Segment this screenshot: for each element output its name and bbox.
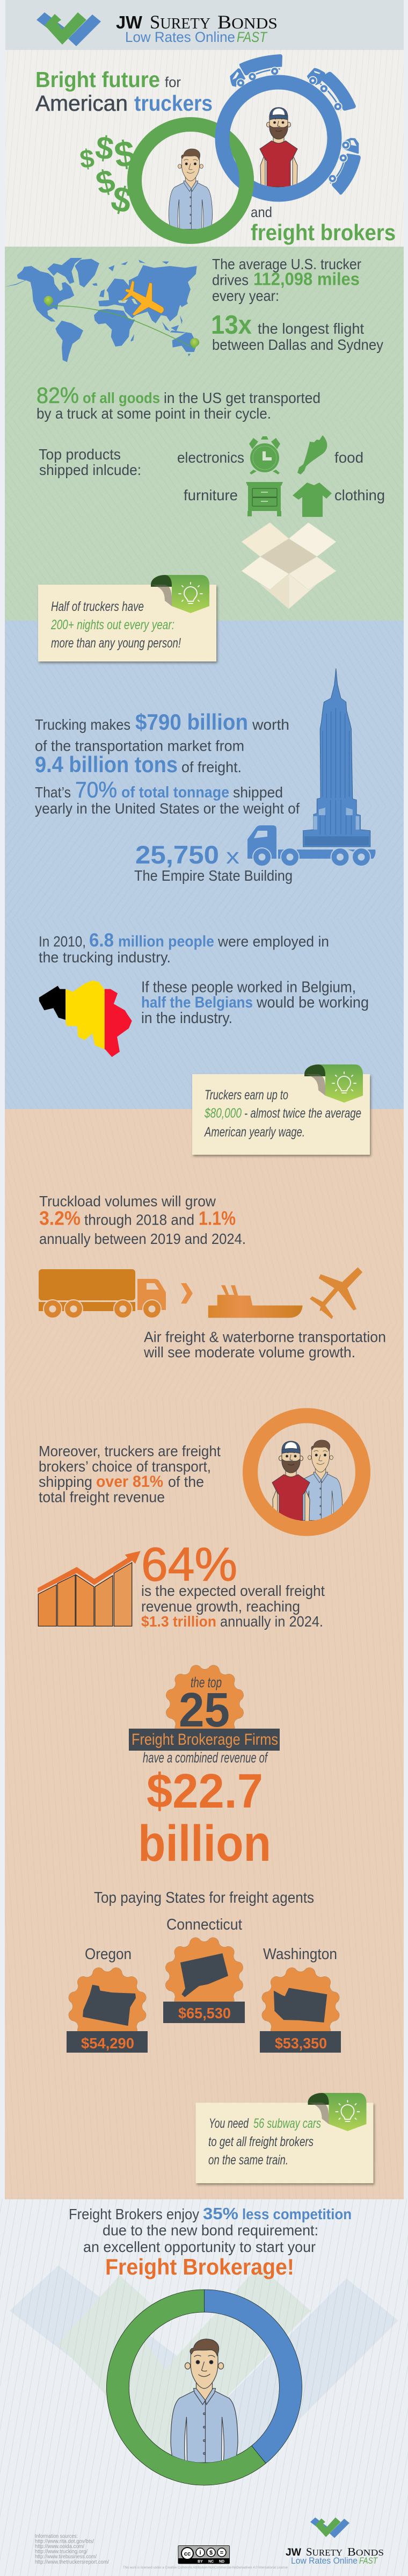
icon: dollar signs: $ xyxy=(78,145,96,174)
text: over 81 percent xyxy=(39,1443,221,1506)
icon: dollar signs: $ xyxy=(107,178,136,221)
text: 82 percent of goods xyxy=(37,383,320,422)
interlocked rings with broker and trucker xyxy=(134,82,334,236)
broker figure xyxy=(171,2339,238,2463)
text: trucking market value xyxy=(35,709,300,817)
callout text: Truckers earn up to xyxy=(205,1088,288,1103)
callout text: 200+ nights out every year: xyxy=(50,617,174,632)
flight route xyxy=(49,306,194,348)
text: trucking market value: shipped xyxy=(233,784,283,801)
state badge: Washington: Washington xyxy=(263,1946,337,1963)
icon: alarm clock xyxy=(249,436,280,474)
icon: flatbed truck xyxy=(247,825,376,866)
text: 6.8 million people: million people xyxy=(118,933,214,950)
text: 25,750 times: x xyxy=(226,845,239,868)
icon: open cardboard box xyxy=(242,522,336,609)
subtitle: and xyxy=(251,204,272,220)
text: 64 percent growth: revenue growth, reaching xyxy=(141,1598,300,1615)
footer brand logo: Low Rates Online xyxy=(291,2556,358,2566)
text: trucker miles: every year: xyxy=(212,287,279,304)
text: information sources xyxy=(35,2534,109,2565)
text: 64 percent growth: is the expected overall freight xyxy=(141,1582,325,1599)
icon: Creative Commons licence badge: NC xyxy=(208,2560,214,2564)
chart: rising bars with arrow xyxy=(38,1551,141,1626)
text: top products: shipped inlcude: xyxy=(39,462,141,478)
tagline: FAST xyxy=(237,29,268,45)
callout text: $80,000 xyxy=(204,1106,242,1121)
text: 6.8 million people: the trucking industry. xyxy=(39,949,171,966)
truck one xyxy=(230,54,282,88)
text: trucker miles: drives xyxy=(212,272,249,288)
text: trucker miles: The average U.S. trucker xyxy=(212,256,361,272)
trucker figure xyxy=(260,107,297,188)
tagline: Low Rates Online xyxy=(125,29,235,45)
text: combined revenue: $22.7 xyxy=(147,1765,263,1818)
text: trucking market value: worth xyxy=(252,716,289,733)
icon: Creative Commons licence badge: $ xyxy=(209,2550,213,2556)
icon: ribbon with light bulb xyxy=(304,1064,363,1103)
state badge: Oregon xyxy=(63,1946,152,2053)
text: 25,750 times xyxy=(134,840,293,884)
text: less competition: Freight Brokerage! xyxy=(105,2254,294,2279)
icon: dollar signs: $ xyxy=(92,162,119,202)
icon: ribbon with light bulb xyxy=(308,2093,366,2131)
text: 64 percent growth xyxy=(141,1538,325,1630)
brand name: BONDS xyxy=(217,11,278,33)
donut chart: 35 percent with broker xyxy=(106,2290,302,2485)
icon: food drumstick xyxy=(297,435,327,474)
badge: top 25 freight brokerage firms xyxy=(129,1659,280,1751)
icon: t-shirt xyxy=(293,483,332,517)
orange ring with trucker and broker xyxy=(250,1415,363,1528)
text: over 81 percent: shipping xyxy=(39,1473,92,1490)
icon: Creative Commons licence badge: cc xyxy=(184,2551,191,2557)
text: over 81 percent: of the xyxy=(168,1473,204,1490)
heading: top paying states: Top paying States for freight agents xyxy=(94,1889,314,1906)
label: electronics: electronics xyxy=(177,449,244,466)
icon: ship xyxy=(208,1285,303,1318)
callout text: more than any young person! xyxy=(51,636,181,651)
text: trucking market value: That’s xyxy=(35,784,71,801)
callout: nights out xyxy=(38,575,216,661)
callout text xyxy=(50,599,181,651)
text: trucker miles: 112,098 miles xyxy=(253,269,360,289)
icon: map pins xyxy=(44,296,199,349)
text: truckload volumes: through 2018 and xyxy=(84,1211,194,1228)
text: trucker miles: 13x xyxy=(211,311,252,340)
text: information sources: Information sources: xyxy=(35,2534,78,2539)
text: information sources: http://www.rita.dot.gov/bts/ xyxy=(35,2538,94,2545)
icon: dollar signs: $ xyxy=(112,133,137,176)
text: combined revenue: billion xyxy=(138,1815,271,1872)
text: licence note: This work is licensed under a Creative Commons Attribution-NonCommercial-NoDerivatives 4.0 International License xyxy=(123,2566,288,2570)
callout text: American yearly wage. xyxy=(204,1125,305,1140)
text: Belgium comparison xyxy=(141,979,369,1027)
text: over 81 percent: brokers’ choice of transport, xyxy=(39,1458,211,1474)
text: less competition: an excellent opportunity to start your xyxy=(83,2239,316,2255)
text: truckload volumes xyxy=(39,1193,246,1247)
icon: Empire State Building xyxy=(303,668,370,847)
brand name xyxy=(116,11,278,33)
icon: Creative Commons licence badge: BY xyxy=(198,2560,203,2564)
title: for xyxy=(165,74,181,90)
text: less competition: due to the new bond requirement: xyxy=(103,2222,318,2239)
text: truckload volumes: 3.2% xyxy=(39,1207,81,1229)
icon: dollar signs xyxy=(78,129,137,221)
arrow: chevron xyxy=(181,1283,193,1304)
callout text xyxy=(208,2116,321,2168)
callout text: on the same train. xyxy=(208,2153,288,2168)
icon: airplane xyxy=(122,281,164,315)
text: 82 percent of goods: of all goods xyxy=(83,390,160,406)
text: 82 percent of goods: in the US get transported xyxy=(164,390,320,406)
text: 6.8 million people xyxy=(39,930,329,966)
text: less competition xyxy=(69,2204,352,2279)
footer brand logo xyxy=(286,2517,384,2566)
subtitle: freight brokers xyxy=(251,220,396,245)
text: Belgium comparison: If these people worked in Belgium, xyxy=(141,979,356,996)
text: air and water freight: Air freight & waterborne transportation xyxy=(144,1328,386,1345)
text: over 81 percent: over 81% xyxy=(96,1473,163,1491)
text: Belgium comparison: in the industry. xyxy=(141,1010,232,1027)
text: trucker miles: the longest flight xyxy=(258,320,364,337)
callout text: to get all freight brokers xyxy=(208,2134,314,2149)
title xyxy=(35,67,213,116)
text: 6.8 million people: were employed in xyxy=(217,933,329,950)
icon: Creative Commons licence badge: = xyxy=(220,2550,223,2556)
world map with flight route xyxy=(4,258,199,362)
text: 82 percent of goods: by a truck at some point in their cycle. xyxy=(37,405,271,422)
icon: Belgium flag map xyxy=(37,978,135,1059)
text: trucking market value: $790 billion xyxy=(135,709,248,735)
icon: ribbon with light bulb xyxy=(151,575,209,613)
state badge: Connecticut: $65,530 xyxy=(178,2005,231,2021)
label: food: food xyxy=(334,449,363,466)
broker figure xyxy=(169,149,213,229)
truck two xyxy=(307,68,356,111)
callout text: You need xyxy=(209,2116,249,2131)
icon: Creative Commons licence badge: i xyxy=(199,2550,201,2556)
text: trucking market value: of total tonnage xyxy=(121,784,229,801)
icon: trucks around blue ring xyxy=(230,54,361,195)
title: Bright future xyxy=(35,67,160,92)
text: 64 percent growth: annually in 2024. xyxy=(220,1613,323,1630)
state badge: Oregon: Oregon xyxy=(85,1946,132,1963)
text: top products: Top products xyxy=(39,446,121,463)
footer brand logo: JW xyxy=(286,2547,301,2558)
text: 64 percent growth: 64% xyxy=(141,1538,237,1591)
label: furniture: furniture xyxy=(184,487,238,503)
text: 82 percent of goods: 82% xyxy=(37,383,79,408)
text: trucker miles xyxy=(211,256,383,353)
text: combined revenue: have a combined revenue of xyxy=(143,1750,268,1766)
callout: subway cars xyxy=(195,2093,374,2183)
state badge: Connecticut: Connecticut xyxy=(166,1916,242,1933)
state badge: Washington: $53,350 xyxy=(275,2035,327,2052)
icon: dollar signs: $ xyxy=(93,129,116,167)
icon: Creative Commons licence badge xyxy=(178,2546,230,2564)
brand name: JW xyxy=(116,12,143,32)
footer brand logo: SURETY xyxy=(306,2545,343,2558)
footer brand logo: BONDS xyxy=(347,2545,384,2558)
title: American xyxy=(35,91,128,116)
text: truckload volumes: annually between 2019 and 2024. xyxy=(39,1231,246,1247)
text: air and water freight: will see moderate volume growth. xyxy=(143,1344,355,1361)
text: information sources: http://www.ooida.com/ xyxy=(35,2544,84,2550)
title: truckers xyxy=(134,91,213,116)
text: trucking market value: Trucking makes xyxy=(35,716,130,733)
state badge: Oregon: $54,290 xyxy=(81,2035,134,2052)
text: truckload volumes: Truckload volumes will grow xyxy=(39,1193,216,1210)
header: brand logo and name xyxy=(37,11,278,46)
callout text: Half of truckers have xyxy=(51,599,144,614)
brand name: SURETY xyxy=(150,11,210,33)
text: 25,750 times: The Empire State Building xyxy=(134,867,293,884)
watermark logo xyxy=(10,2265,398,2470)
text: combined revenue xyxy=(138,1750,271,1872)
state badge: Washington xyxy=(256,1946,345,2053)
arrow: growth xyxy=(38,1551,141,1592)
text: less competition: 35% xyxy=(203,2204,238,2223)
truck three xyxy=(328,138,361,195)
badge: top 25 freight brokerage firms: 25 xyxy=(179,1683,230,1737)
badge: top 25 freight brokerage firms: Freight Brokerage Firms xyxy=(132,1731,278,1748)
icon: Creative Commons licence badge: ND xyxy=(219,2560,224,2564)
badge: top 25 freight brokerage firms: the top xyxy=(191,1674,222,1690)
text: trucking market value: of the transportation market from xyxy=(35,737,244,754)
text: trucker miles: between Dallas and Sydney xyxy=(212,336,383,353)
subtitle xyxy=(251,204,396,245)
callout: trucker earnings xyxy=(192,1064,370,1155)
text: top products xyxy=(39,446,141,478)
text: information sources: http://www.trucking.org/ xyxy=(35,2549,88,2555)
text: less competition: less competition xyxy=(242,2206,352,2222)
text: Belgium comparison: would be working xyxy=(256,994,369,1011)
text: over 81 percent: Moreover, truckers are freight xyxy=(39,1443,221,1459)
text: truckload volumes: 1.1% xyxy=(199,1207,236,1229)
text: Belgium comparison: half the Belgians xyxy=(141,994,253,1011)
label: clothing: clothing xyxy=(334,487,385,503)
icon: airplane xyxy=(310,1267,362,1319)
callout text: - almost twice the average xyxy=(244,1106,361,1121)
text: 6.8 million people: In 2010, xyxy=(39,933,86,950)
text: trucking market value: 9.4 billion tons xyxy=(35,752,178,777)
text: 6.8 million people: 6.8 xyxy=(89,930,114,951)
state badge: Connecticut xyxy=(160,1916,249,2023)
footer brand logo: FAST xyxy=(359,2556,378,2566)
text: information sources: http://www.thetruckersreport.com/ xyxy=(35,2559,109,2565)
text: 25,750 times: 25,750 xyxy=(135,840,219,869)
text: trucking market value: 70% xyxy=(75,777,117,802)
icon: orange truck xyxy=(39,1269,166,1318)
text: less competition: Freight Brokers enjoy xyxy=(69,2206,199,2222)
text: over 81 percent: total freight revenue xyxy=(39,1488,165,1506)
icon: JW logo xyxy=(37,12,101,46)
callout text xyxy=(204,1088,361,1140)
text: trucking market value: of freight. xyxy=(181,759,242,775)
text: information sources: http://www.tirebusiness.com/ xyxy=(35,2554,97,2560)
icon: furniture drawers xyxy=(246,482,283,516)
text: air and water freight xyxy=(143,1328,386,1361)
callout text: 56 subway cars xyxy=(253,2116,321,2131)
text: 64 percent growth: $1.3 trillion xyxy=(141,1613,216,1630)
text: trucking market value: yearly in the United States or the weight of xyxy=(35,800,300,817)
